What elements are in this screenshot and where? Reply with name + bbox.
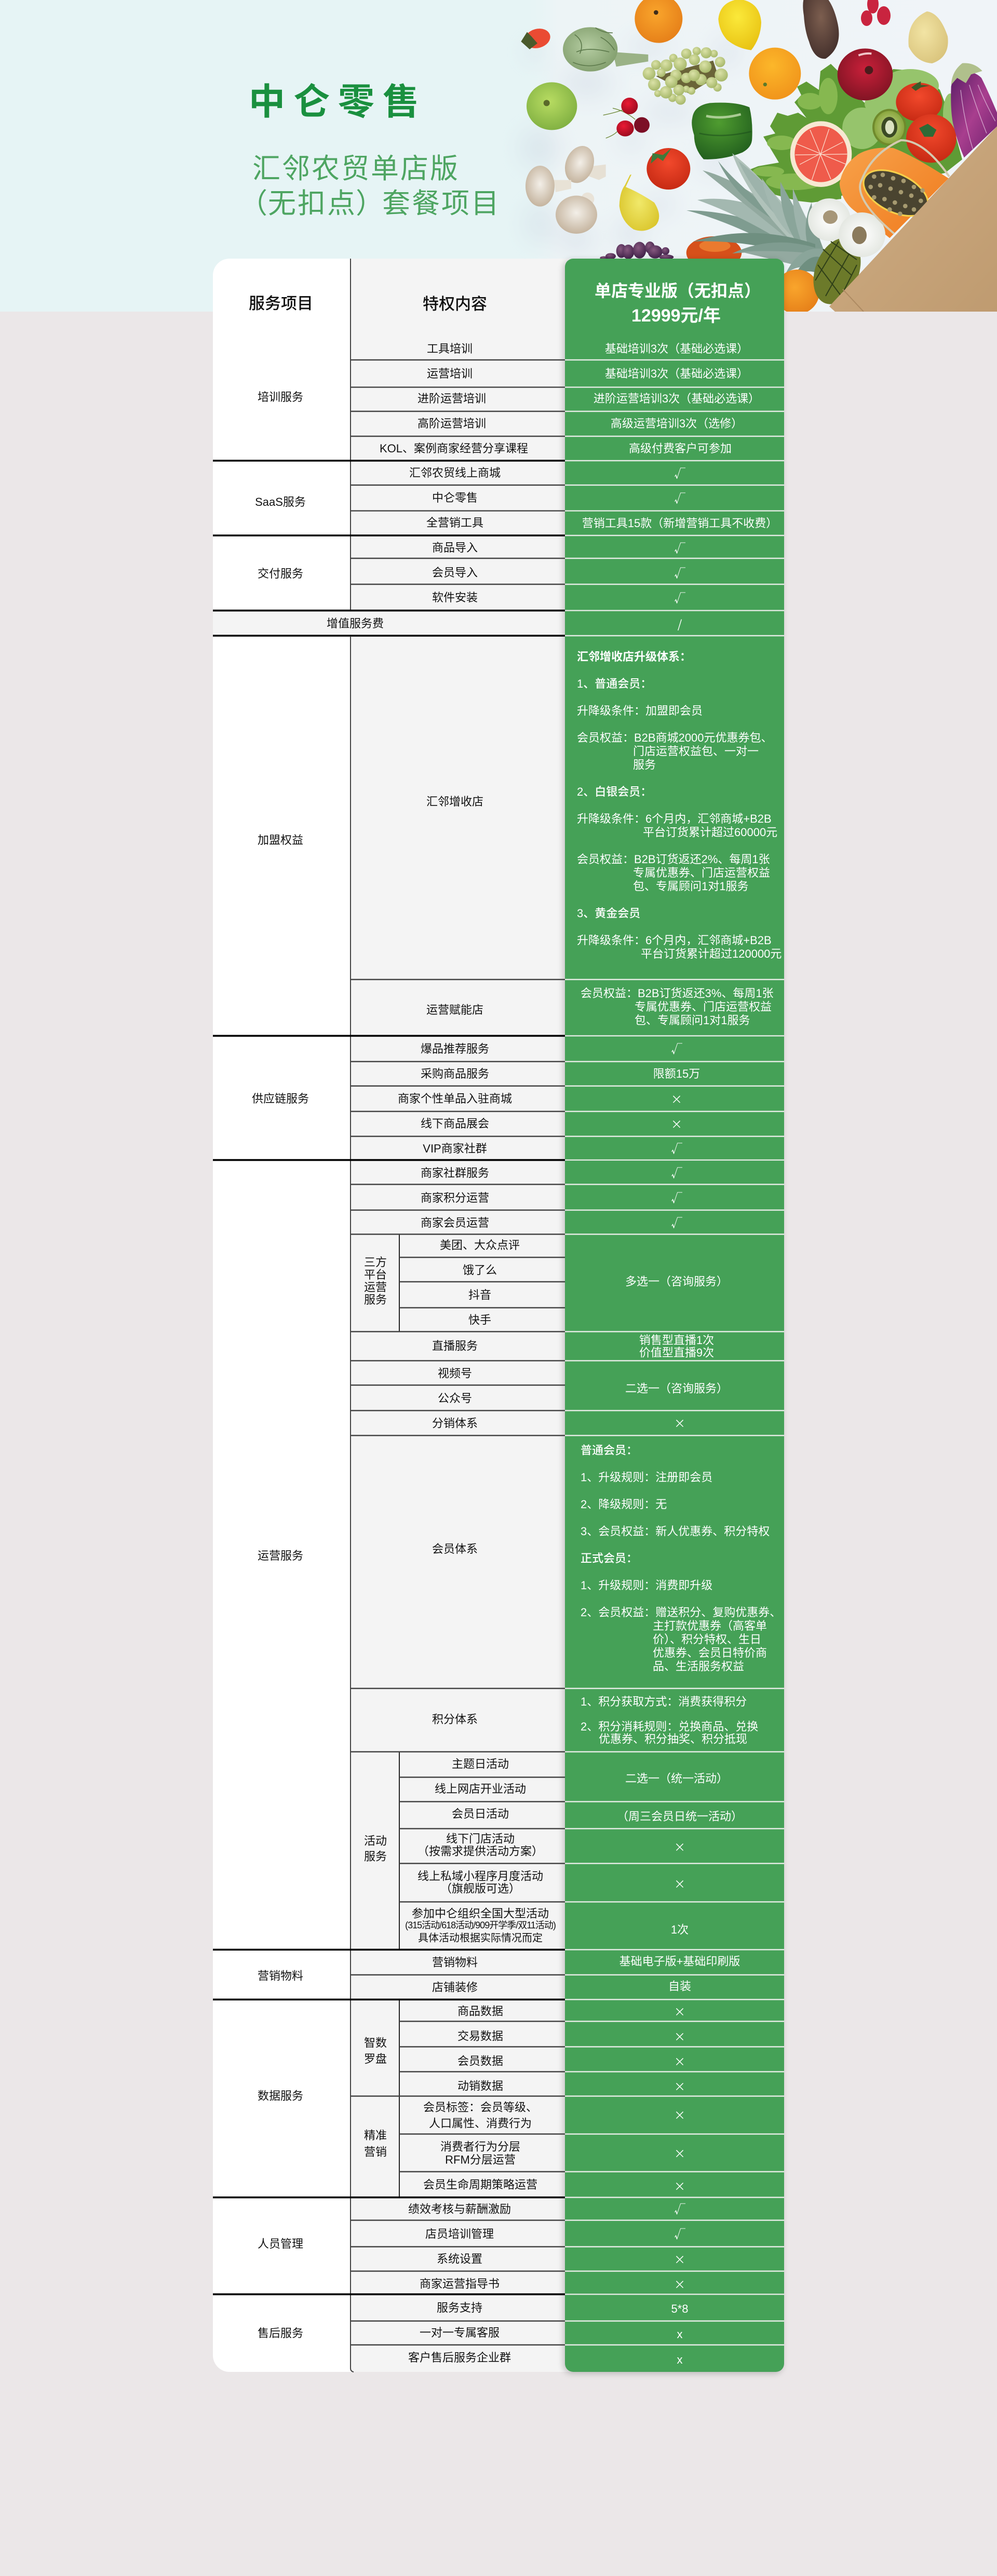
- 商家会员运营: 商家会员运营: [421, 1216, 489, 1229]
- 线上网店开业活动: 线上网店开业活动: [435, 1782, 526, 1795]
- 积分体系: 积分体系: [432, 1713, 478, 1726]
- pineapple crown: [686, 153, 826, 275]
- 全国大型活动: 参加中仑组织全国大型活动: [412, 1907, 549, 1920]
- purple grapes: [600, 242, 673, 260]
- panel: 供应链服务: [252, 1040, 700, 1157]
- panel: SaaS服务: [255, 465, 777, 530]
- cross: ×: [674, 2028, 685, 2045]
- 商家个性单品入驻商城: 商家个性单品入驻商城: [398, 1092, 512, 1105]
- 多选一: 多选一（咨询服务）: [625, 1275, 728, 1288]
- 活动服务: 活动: [364, 1834, 387, 1847]
- grapes: [656, 61, 718, 93]
- panel: 增值服务费: [327, 615, 682, 632]
- text block: 普通会员: 1、普通会员：: [577, 677, 652, 690]
- text block: 降级规则: 2、降级规则：无: [581, 1498, 667, 1511]
- cross: ×: [674, 2078, 685, 2095]
- 线下门店活动: [417, 1832, 543, 1858]
- 爆品推荐服务: 爆品推荐服务: [421, 1042, 489, 1055]
- 线下门店活动: 线下门店活动: [446, 1832, 515, 1845]
- check: √: [674, 565, 685, 581]
- 交易数据: 交易数据: [457, 2030, 503, 2043]
- 交付服务: 交付服务: [258, 567, 303, 580]
- 商品数据: 商品数据: [457, 2005, 503, 2018]
- 工具培训: 工具培训: [427, 342, 473, 355]
- value: x: [677, 2353, 682, 2366]
- text block: 会员权益: 会员权益：B2B订货返还2%、每周1张: [577, 853, 770, 866]
- heading: 特权内容: 特权内容: [423, 295, 487, 313]
- 运营赋能店: 运营赋能店: [426, 1003, 483, 1016]
- 三方平台运营服务: [364, 1256, 387, 1306]
- 加盟权益: 加盟权益: [258, 834, 303, 847]
- 具体活动: 具体活动根据实际情况而定: [418, 1933, 543, 1944]
- pineapple body: [805, 232, 869, 311]
- 培训服务: 培训服务: [258, 391, 303, 404]
- comparison table: [249, 281, 782, 2366]
- string handle: [860, 140, 949, 234]
- paper bag: [829, 126, 997, 312]
- cross: ×: [674, 2178, 685, 2194]
- 直播 value: 销售型直播1次: [639, 1334, 714, 1347]
- 三方平台运营服务: 三方: [364, 1256, 387, 1269]
- cross: ×: [674, 2107, 685, 2123]
- 进阶运营培训: 进阶运营培训: [417, 392, 486, 405]
- 公众号: 公众号: [438, 1392, 472, 1405]
- 会员日活动: 会员日活动: [452, 1807, 509, 1820]
- text block: 会员权益: [581, 1606, 781, 1673]
- text block: 运营赋能店权益: [581, 987, 774, 1027]
- VIP商家社群: VIP商家社群: [423, 1142, 487, 1155]
- 系统设置: 系统设置: [437, 2252, 482, 2265]
- 精准营销: [364, 2129, 387, 2158]
- panel: 售后服务: [258, 2301, 689, 2366]
- 分销体系: 分销体系: [432, 1417, 478, 1430]
- top row fruit in crop coordinates: [521, 0, 801, 269]
- check: √: [674, 540, 685, 556]
- text block: 会员权益: 优惠券、会员日特价商: [653, 1646, 767, 1659]
- text block: 正式会员: 正式会员：: [581, 1552, 638, 1565]
- text block: 会员权益: [577, 731, 773, 771]
- 商家积分运营: 商家积分运营: [421, 1191, 489, 1204]
- tomatoes: [896, 83, 942, 122]
- grapefruit: [790, 121, 852, 187]
- 一对一专属客服: 一对一专属客服: [420, 2326, 500, 2339]
- value: 基础培训3次（基础必选课）: [605, 342, 748, 355]
- SaaS服务: SaaS服务: [255, 495, 306, 508]
- 活动说明: (315活动/618活动/909开学季/双11活动): [405, 1920, 556, 1930]
- 活动服务: [364, 1834, 387, 1863]
- heading: 价格: 12999元/年: [631, 306, 721, 326]
- 智数罗盘: [364, 2036, 387, 2065]
- column background: privilege content: [351, 259, 575, 2372]
- 营销物料: 营销物料: [258, 1969, 303, 1982]
- text block: 升降级条件: [577, 812, 777, 839]
- 抖音: 抖音: [468, 1289, 491, 1302]
- 二选一: 二选一（咨询服务）: [625, 1382, 728, 1395]
- value: 高级运营培训3次（选修）: [611, 417, 743, 430]
- value: 自装: [668, 1980, 691, 1993]
- text block: 升降级条件: [577, 934, 782, 960]
- 全营销工具: 全营销工具: [426, 516, 483, 529]
- text block: 升降级条件: 平台订货累计超过60000元: [643, 826, 777, 839]
- text block: 会员权益: 3、会员权益：新人优惠券、积分特权: [581, 1525, 770, 1538]
- 线上私域小程序: 线上私域小程序月度活动: [417, 1870, 543, 1883]
- title: 中仑零售: [249, 82, 427, 122]
- text block: 升降级条件: 升降级条件：加盟即会员: [577, 704, 703, 717]
- 精准营销: 营销: [364, 2145, 387, 2158]
- 智数罗盘: 罗盘: [364, 2052, 387, 2065]
- 客户售后服务企业群: 客户售后服务企业群: [408, 2351, 511, 2364]
- 店员培训管理: 店员培训管理: [425, 2228, 494, 2240]
- check: √: [671, 1140, 682, 1157]
- text block: 运营赋能店权益: 包、专属顾问1对1服务: [635, 1014, 750, 1027]
- 商品导入: 商品导入: [432, 541, 478, 554]
- 汇邻农贸线上商城: 汇邻农贸线上商城: [409, 466, 501, 479]
- text block: 会员权益: 会员权益：B2B商城2000元优惠券包、: [577, 731, 773, 744]
- text block: 会员权益: 门店运营权益包、一对一: [633, 745, 759, 758]
- kiwi: [872, 109, 906, 145]
- text block: 会员权益: [577, 853, 770, 893]
- 供应链服务: 供应链服务: [252, 1092, 309, 1105]
- 三方平台运营服务: 平台: [364, 1268, 387, 1281]
- 会员导入: 会员导入: [432, 566, 478, 579]
- panel: 人员管理: [258, 2201, 685, 2292]
- panel: 加盟权益: [258, 650, 782, 1027]
- text block: 升降级条件: 平台订货累计超过120000元: [641, 947, 782, 960]
- text block: 运营赋能店权益: 专属优惠券、门店运营权益: [635, 1000, 772, 1013]
- subtitle: 汇邻农贸单店版: [252, 153, 460, 184]
- 活动服务: 服务: [364, 1850, 387, 1863]
- 高阶运营培训: 高阶运营培训: [417, 417, 486, 430]
- panel: 运营服务: [258, 1164, 781, 1944]
- subtitle: [252, 153, 501, 219]
- 智数罗盘: 智数: [364, 2036, 387, 2049]
- column background: service items: [213, 259, 352, 2372]
- check: √: [671, 1189, 682, 1206]
- value: 5*8: [671, 2302, 689, 2315]
- heading: 服务项目: 服务项目: [249, 294, 313, 313]
- text block: 会员权益: 2、会员权益：赠送积分、复购优惠券、: [581, 1606, 781, 1619]
- cross: ×: [674, 1839, 685, 1855]
- 人员管理: 人员管理: [258, 2237, 303, 2250]
- cross: ×: [674, 2053, 685, 2070]
- text block: 黄金会员: 3、黄金会员: [577, 907, 640, 920]
- text block: 会员权益: 主打款优惠券（高客单: [653, 1619, 767, 1632]
- 消费者行为分层: 消费者行为分层: [440, 2140, 520, 2153]
- text block: 运营赋能店权益: 会员权益：B2B订货返还3%、每周1张: [581, 987, 774, 1000]
- 精准营销: 精准: [364, 2129, 387, 2142]
- value: 基础电子版+基础印刷版: [619, 1955, 740, 1968]
- 汇邻增收店: 汇邻增收店: [426, 795, 483, 808]
- 快手: 快手: [468, 1313, 491, 1326]
- orange bottom: [775, 270, 819, 314]
- background band: [0, 0, 997, 312]
- 直播 value: 价值型直播9次: [639, 1346, 714, 1359]
- 增值服务费: 增值服务费: [327, 617, 384, 630]
- 线上私域小程序: [417, 1870, 543, 1895]
- 中仑零售: 中仑零售: [432, 491, 478, 504]
- 售后服务: 售后服务: [258, 2327, 303, 2340]
- cross: ×: [674, 1415, 685, 1431]
- cross: ×: [674, 2276, 685, 2292]
- text block: 积分消耗规则: 2、积分消耗规则：兑换商品、兑换: [581, 1720, 758, 1733]
- text block: 升级规则: 1、升级规则：注册即会员: [581, 1471, 712, 1484]
- 消费者行为分层: RFM分层运营: [445, 2153, 516, 2166]
- 营销物料: 营销物料: [432, 1956, 478, 1969]
- value: 基础培训3次（基础必选课）: [605, 367, 748, 380]
- tomato: [646, 148, 690, 190]
- 会员数据: 会员数据: [457, 2055, 503, 2068]
- 二选一: 二选一（统一活动）: [625, 1772, 728, 1785]
- text block: 白银会员: 2、白银会员：: [577, 785, 652, 798]
- panel: 交付服务: [258, 540, 685, 606]
- text block: 积分获取方式: 1、积分获取方式：消费获得积分: [581, 1695, 747, 1708]
- value: x: [677, 2328, 682, 2341]
- 会员体系: 会员体系: [432, 1542, 478, 1555]
- text block: 升级体系: 汇邻增收店升级体系：: [577, 650, 691, 663]
- strawberry: [522, 26, 553, 51]
- shadows: [519, 36, 740, 254]
- 视频号: 视频号: [438, 1367, 472, 1380]
- slash: /: [678, 615, 682, 632]
- red apple: [838, 48, 893, 100]
- text block: 升级规则: 1、升级规则：消费即升级: [581, 1579, 712, 1592]
- 主题日活动: 主题日活动: [452, 1757, 509, 1770]
- 服务支持: 服务支持: [437, 2301, 482, 2314]
- 直播服务: 直播服务: [432, 1339, 478, 1352]
- garlic: [808, 198, 851, 241]
- 1次: 1次: [671, 1923, 689, 1936]
- cross: ×: [674, 1875, 685, 1892]
- 运营培训: 运营培训: [427, 367, 473, 380]
- 商家运营指导书: 商家运营指导书: [420, 2277, 500, 2290]
- panel: 营销物料: [258, 1955, 740, 1994]
- cross: ×: [674, 2145, 685, 2162]
- column background: green plan column: [565, 259, 784, 2372]
- value: 限额15万: [653, 1067, 700, 1080]
- papaya: [840, 147, 949, 238]
- text block: 会员权益: 品、生活服务权益: [653, 1660, 744, 1673]
- cross: ×: [671, 1116, 682, 1132]
- 会员标签: 人口属性、消费行为: [429, 2117, 532, 2130]
- photo: fruits and vegetables in a paper bag: [521, 0, 997, 312]
- check: √: [674, 465, 685, 481]
- pear: [619, 175, 659, 231]
- 店铺装修: 店铺装修: [432, 1981, 478, 1994]
- green apple: [527, 82, 577, 130]
- text block: 会员权益: 包、专属顾问1对1服务: [633, 880, 748, 893]
- text block: 积分消耗规则: 优惠券、积分抽奖、积分抵现: [599, 1733, 747, 1746]
- cross: ×: [674, 2251, 685, 2268]
- text block: 普通会员: 普通会员：: [581, 1444, 638, 1457]
- 商家社群服务: 商家社群服务: [421, 1166, 489, 1179]
- 周三会员日: （周三会员日统一活动）: [617, 1810, 743, 1823]
- check: √: [674, 589, 685, 606]
- value: 进阶运营培训3次（基础必选课）: [594, 392, 760, 405]
- tomato bottom: [686, 236, 742, 269]
- 三方平台运营服务: 运营: [364, 1281, 387, 1294]
- check: √: [671, 1214, 682, 1231]
- 数据服务: 数据服务: [258, 2089, 303, 2102]
- text block: 会员权益: 服务: [633, 758, 656, 771]
- 软件安装: 软件安装: [432, 591, 478, 604]
- value: 高级付费客户可参加: [629, 442, 732, 455]
- 绩效考核与薪酬激励: 绩效考核与薪酬激励: [408, 2203, 511, 2216]
- text block: 升降级条件: 升降级条件：6个月内，汇邻商城+B2B: [577, 934, 772, 947]
- 会员标签: [423, 2101, 537, 2130]
- check: √: [674, 490, 685, 506]
- 三方平台运营服务: 服务: [364, 1293, 387, 1306]
- orange 1: [635, 0, 682, 43]
- greens: [745, 64, 962, 203]
- cross: ×: [674, 2003, 685, 2020]
- lemon: [718, 0, 761, 50]
- check: √: [671, 1164, 682, 1181]
- check: √: [674, 2225, 685, 2242]
- cross: ×: [671, 1091, 682, 1107]
- avocado, raspberries, potato: [803, 0, 839, 59]
- subtitle: （无扣点） 套餐项目: [252, 188, 501, 219]
- right cluster in crop coordinates: [790, 48, 997, 238]
- check: √: [674, 2201, 685, 2217]
- 线下商品展会: 线下商品展会: [421, 1117, 489, 1130]
- text block: 会员权益: 价）、积分特权、生日: [653, 1633, 761, 1646]
- green pepper: [692, 103, 752, 159]
- 采购商品服务: 采购商品服务: [421, 1067, 489, 1080]
- 会员生命周期策略运营: 会员生命周期策略运营: [423, 2178, 537, 2191]
- text block: 升降级条件: 升降级条件：6个月内，汇邻商城+B2B: [577, 812, 772, 825]
- cherries: [603, 108, 635, 138]
- value: 营销工具15款（新增营销工具不收费）: [582, 517, 777, 530]
- text block: 会员权益: 专属优惠券、门店运营权益: [633, 866, 770, 879]
- 消费者行为分层: [440, 2140, 520, 2166]
- 动销数据: 动销数据: [457, 2079, 503, 2092]
- mushrooms: [585, 165, 606, 180]
- text block: 积分消耗规则: [581, 1720, 758, 1746]
- panel: 数据服务: [258, 2003, 685, 2194]
- 线下门店活动: （按需求提供活动方案）: [417, 1845, 543, 1858]
- 直播 value: [639, 1334, 714, 1359]
- heading: 单店专业版: 单店专业版（无扣点）: [595, 281, 761, 300]
- 美团、大众点评: 美团、大众点评: [440, 1239, 520, 1252]
- artichoke: [613, 52, 648, 66]
- check: √: [671, 1040, 682, 1057]
- eggplant: [951, 73, 997, 157]
- 运营服务: 运营服务: [258, 1549, 303, 1562]
- 线上私域小程序: （旗舰版可选）: [440, 1882, 520, 1895]
- 会员标签: 会员标签：会员等级、: [423, 2101, 537, 2114]
- 饿了么: 饿了么: [463, 1264, 497, 1277]
- KOL课程: KOL、案例商家经营分享课程: [380, 442, 528, 455]
- orange 2: [749, 48, 801, 100]
- panel: 表头与培训服务: [249, 281, 761, 455]
